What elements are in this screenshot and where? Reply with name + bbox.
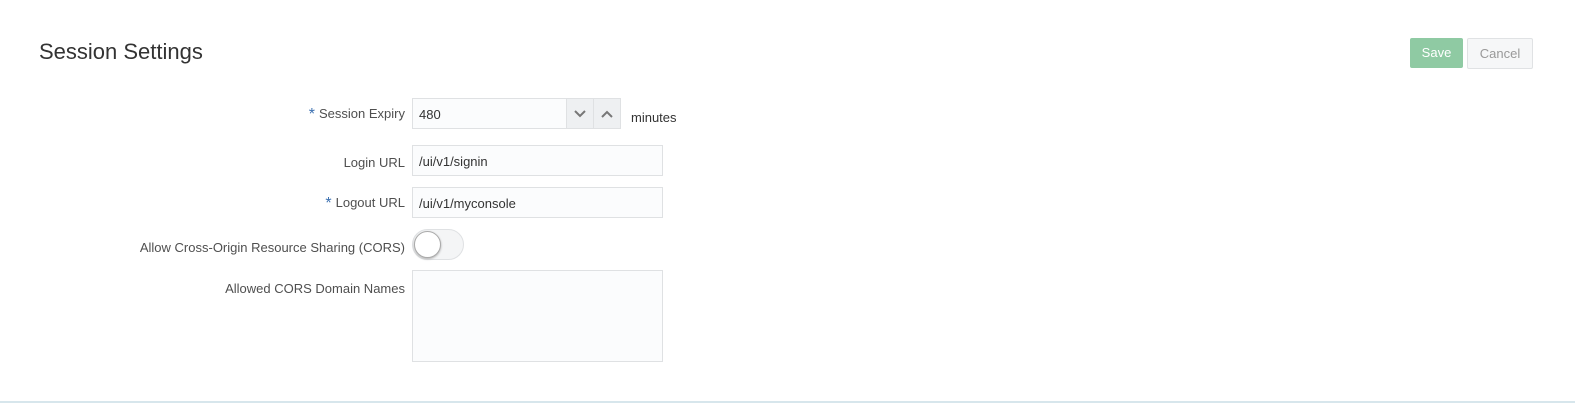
button: cancel [1467, 38, 1533, 69]
input: logout url [412, 187, 663, 218]
button: save: Save [1422, 45, 1451, 60]
label: session expiry: * Session Expiry [309, 106, 405, 123]
button: save [1410, 38, 1463, 68]
toggle switch [412, 229, 464, 260]
unit: minutes: minutes [631, 110, 677, 125]
input: login url [412, 145, 663, 176]
input: session expiry [412, 98, 621, 129]
input: login url: /ui/v1/signin [419, 154, 488, 169]
bottom divider [0, 401, 1575, 403]
input: logout url: /ui/v1/myconsole [419, 196, 516, 211]
label: logout url: * Logout URL [325, 195, 405, 212]
label: allowed cors domain names: Allowed CORS Domain Names [225, 281, 405, 296]
label: login url: Login URL [344, 155, 405, 170]
textarea [412, 270, 663, 362]
button: cancel: Cancel [1480, 46, 1520, 61]
label: cors: Allow Cross-Origin Resource Sharing (CORS) [140, 240, 405, 255]
title: Session Settings [39, 39, 203, 64]
spinner buttons [566, 98, 621, 129]
input: session expiry: 480 [419, 107, 441, 122]
